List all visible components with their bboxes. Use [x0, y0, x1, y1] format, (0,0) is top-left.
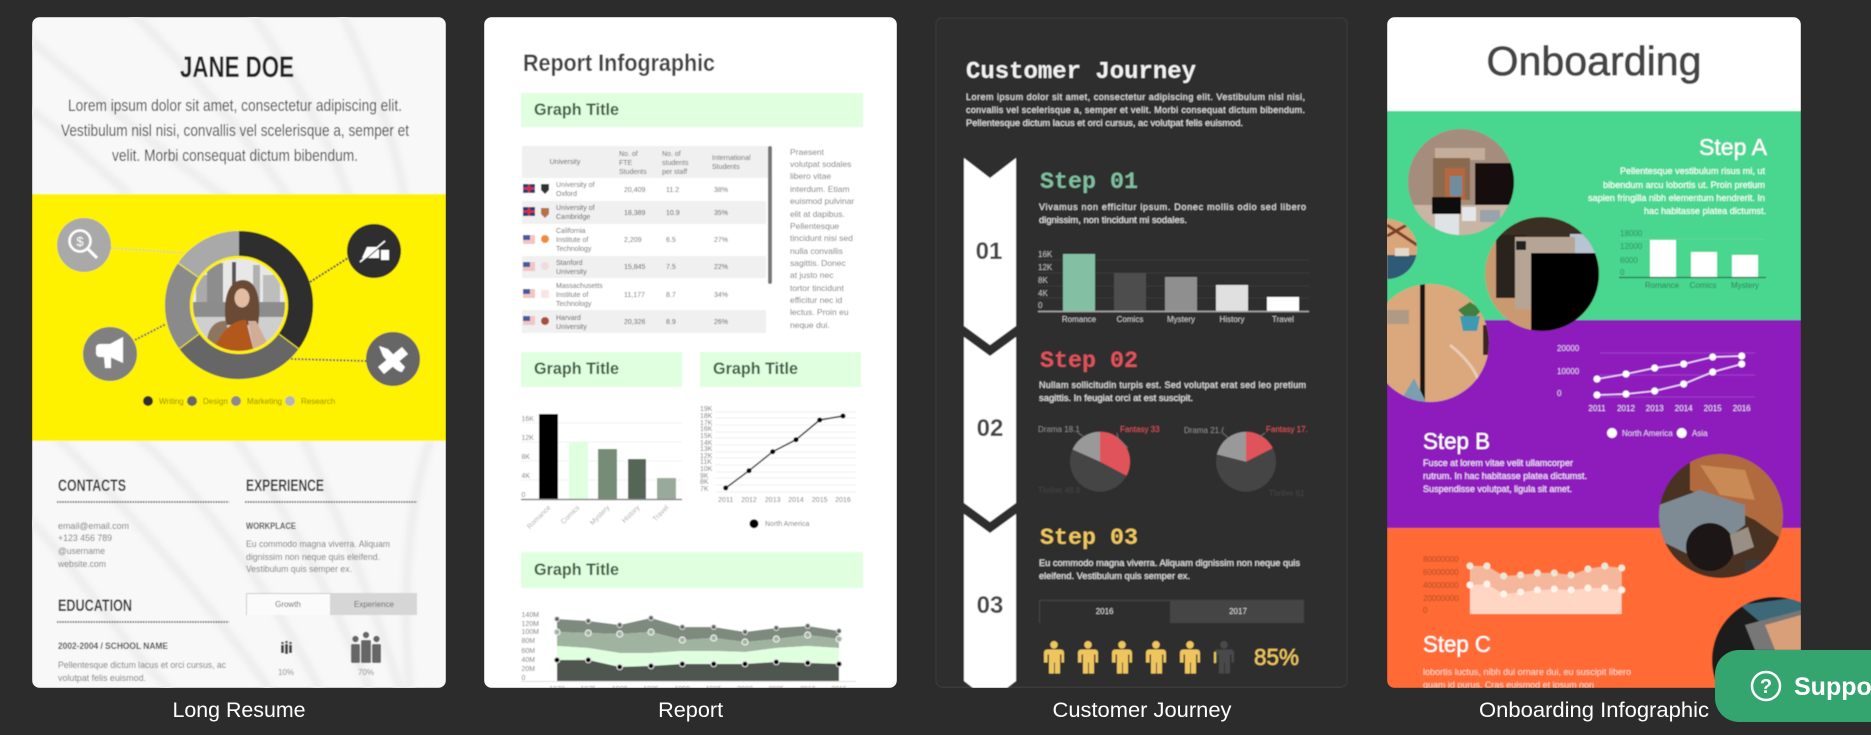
pie chart: left: Drama 18.1 — [1038, 425, 1080, 434]
table: universities: 35% — [714, 210, 728, 217]
side paragraph: efficitur nec id — [790, 295, 843, 305]
bar chart: step A: Romance — [1645, 281, 1680, 290]
side paragraph: neque dui. — [790, 320, 830, 330]
donut chart — [177, 243, 301, 367]
contacts text — [57, 521, 129, 569]
line chart: 16K — [700, 426, 713, 433]
pie chart: left: Fantasy 33 — [1120, 425, 1160, 434]
pie chart: right: Fantasy 17. — [1266, 425, 1308, 434]
step 01 text: dignissim, non tincidunt mi sodales. — [1039, 215, 1187, 225]
line chart: 2014 — [788, 497, 804, 504]
bar chart: 4K — [522, 473, 530, 480]
table: universities: California — [556, 228, 586, 235]
table: universities: Technology — [556, 246, 592, 253]
table: universities: Stanford — [556, 260, 583, 267]
education text: Pellentesque dictum lacus et orci cursus, ac — [58, 660, 226, 670]
tabs: growth and experience: Growth — [275, 600, 301, 609]
experience text — [246, 521, 390, 574]
stat: 85 percent: 85% — [1254, 644, 1299, 670]
chevron: step 01: 01 — [976, 238, 1002, 265]
table: universities: International — [712, 155, 751, 162]
stacked area chart: 2005 — [769, 686, 784, 693]
pictogram: people 85 percent — [1044, 641, 1234, 674]
stacked area chart: 1975 — [581, 686, 596, 693]
connector lines — [111, 248, 366, 361]
table: universities: Harvard — [556, 315, 581, 322]
table: universities: 7.5 — [666, 264, 676, 271]
bar chart: step 01: 0 — [1038, 301, 1043, 310]
banner: graph title 1: Graph Title — [534, 101, 619, 119]
heading: contacts: CONTACTS — [58, 476, 126, 495]
chart legend: Design — [203, 397, 228, 406]
table: universities: Institute of — [556, 237, 588, 244]
percent labels: 70% — [358, 668, 374, 677]
bar chart: Comics — [560, 504, 582, 526]
line chart: step B: 2013 — [1646, 404, 1664, 413]
side paragraph: euismod pulvinar — [790, 196, 854, 206]
icon: search money — [57, 218, 111, 272]
table: universities: University of — [556, 205, 595, 212]
heading: step 01: Step 01 — [1040, 169, 1138, 195]
bar chart: step 01: Romance — [1062, 315, 1097, 324]
table: universities: University — [550, 159, 581, 166]
side paragraph: at justo nec — [790, 270, 834, 280]
step C text: quam id purus. Cras euismod et ipsum non — [1423, 680, 1594, 690]
banner: graph title 1 — [521, 93, 863, 127]
icon: pencil and ruler — [366, 332, 420, 386]
stacked area chart: 80M — [522, 638, 535, 645]
pie chart: right — [1184, 425, 1308, 498]
band: step C orange — [1387, 528, 1801, 688]
intro paragraph: Lorem ipsum dolor sit amet, consectetur adipiscing elit. Vestibulum nisl nisi, — [966, 92, 1305, 102]
table: universities: students — [662, 160, 689, 167]
line chart: 13K — [700, 446, 713, 453]
step A text — [1588, 166, 1766, 216]
icon: help question mark: ? — [1760, 676, 1772, 698]
line chart: 10K — [700, 466, 713, 473]
title: customer journey: Customer Journey — [966, 59, 1196, 86]
table: universities: 10.9 — [666, 210, 680, 217]
step 02 text: sagittis. In feugiat orci at est suscipit. — [1039, 393, 1193, 403]
bar chart: Romance — [526, 504, 552, 531]
table: universities: 38% — [714, 187, 728, 194]
line chart: step B: 10000 — [1557, 367, 1580, 376]
experience text: Eu commodo magna viverra. Aliquam — [246, 539, 390, 549]
panel: onboarding card — [1357, 17, 1838, 723]
table: universities: Cambridge — [556, 214, 590, 221]
tabs: 2016 and 2017 — [1040, 600, 1304, 623]
icon: writing hand — [347, 224, 401, 278]
contacts text: @username — [58, 546, 105, 556]
table: universities: per staff — [662, 169, 687, 176]
intro paragraph: Vestibulum nisl nisi, convallis vel scelerisque a, semper et — [61, 121, 409, 140]
table: universities: Students — [712, 164, 740, 171]
step B text — [1423, 458, 1587, 494]
band: step B purple — [1387, 320, 1801, 528]
photo circle: office wall — [1408, 129, 1515, 235]
step A text: Pellentesque vestibulum risus mi, ut — [1620, 166, 1765, 176]
line chart: step B — [1557, 344, 1755, 438]
pie chart: left: Thriller 48.8 — [1038, 486, 1081, 495]
stacked area chart: 1980 — [612, 686, 628, 693]
stacked area chart: 20M — [522, 666, 535, 673]
step A text: sapien fringilla nibh elementum hendrerit. In — [1588, 193, 1765, 203]
banner: graph title 4 — [521, 552, 863, 588]
table: universities: 18,389 — [624, 210, 646, 217]
intro paragraph: Lorem ipsum dolor sit amet, consectetur adipiscing elit. — [68, 96, 402, 115]
bar chart: step 01: 12K — [1038, 263, 1053, 272]
table: universities — [522, 146, 772, 333]
chevron: step 02: 02 — [977, 415, 1003, 442]
stacked area chart: 140M — [522, 612, 539, 619]
photo circle: computers on desk — [1485, 217, 1600, 333]
line chart: 2016 — [835, 497, 851, 504]
table: universities: 26% — [714, 319, 728, 326]
band: step A green — [1387, 111, 1801, 320]
table: universities: 6.5 — [666, 237, 676, 244]
panel: customer journey card — [936, 18, 1348, 688]
photo circle: wood desk with plant — [1371, 284, 1489, 402]
portrait photo — [190, 255, 290, 357]
table: universities: University — [556, 269, 587, 276]
stacked area chart: 0 — [522, 675, 526, 682]
step 03 text: eleifend. Vestibulum quis semper ex. — [1039, 571, 1190, 581]
step 03 text: Eu commodo magna viverra. Aliquam dignissim non neque quis — [1039, 558, 1301, 568]
table: universities: Technology — [556, 301, 592, 308]
chevron: step 03: 03 — [977, 592, 1003, 619]
line chart: step B: 2011 — [1588, 404, 1606, 413]
line chart: step B: 2016 — [1733, 404, 1751, 413]
table: universities: 34% — [714, 292, 728, 299]
banner: graph title 3 — [700, 352, 861, 387]
side paragraph: elit at dapibus. — [790, 209, 845, 219]
table: universities: 22% — [714, 264, 728, 271]
chevron: step 01 — [964, 158, 1016, 345]
table: universities: 8.7 — [666, 292, 676, 299]
table: universities: 20,409 — [624, 187, 646, 194]
icon: small people group — [281, 641, 292, 654]
step C text — [1423, 667, 1631, 690]
bar chart: step A: Mystery — [1731, 281, 1759, 290]
step 01 text — [1039, 202, 1306, 225]
table: universities: 8.9 — [666, 319, 676, 326]
bar chart: step 01: Mystery — [1167, 315, 1195, 324]
stacked area chart: 60M — [522, 648, 535, 655]
table: universities: Institute of — [556, 292, 588, 299]
support button — [1715, 650, 1871, 722]
bar chart: Travel — [652, 504, 671, 523]
side paragraph: tincidunt nisi sed — [790, 233, 853, 243]
line chart: step B: 2014 — [1675, 404, 1693, 413]
heading: step B: Step B — [1423, 428, 1490, 454]
chart legend: Writing — [159, 397, 184, 406]
step A text: bibendum arcu lobortis ut. Proin pretium — [1603, 180, 1765, 190]
pie chart: left — [1038, 425, 1160, 495]
stacked area chart: 2015 — [831, 686, 847, 693]
banner: graph title 2: Graph Title — [534, 360, 619, 378]
bar chart: step 01 — [1038, 250, 1309, 324]
tabs: 2016 and 2017: 2017 — [1229, 607, 1247, 616]
side paragraph: interdum. Etiam — [790, 184, 850, 194]
table: universities: University of — [556, 182, 595, 189]
intro paragraph — [966, 92, 1305, 128]
title: report infographic: Report Infographic — [523, 50, 715, 77]
stacked area chart: 100M — [522, 629, 539, 636]
icon: large people group — [351, 632, 381, 663]
bar chart — [521, 414, 682, 531]
stacked area chart: 1990 — [675, 686, 690, 693]
chevron: step 03 — [964, 514, 1016, 688]
line chart: step B: 2012 — [1617, 404, 1635, 413]
title: JANE DOE: JANE DOE — [180, 51, 294, 84]
bar chart: step 01: Comics — [1117, 315, 1143, 324]
pie chart: right: Thriller 61 — [1269, 489, 1305, 498]
line chart: step B: North America — [1622, 429, 1673, 438]
area chart: step C: 20000000 — [1423, 594, 1459, 603]
table: universities: University — [556, 324, 587, 331]
heading: step 03: Step 03 — [1040, 525, 1138, 551]
side paragraph: libero vitae — [790, 171, 831, 181]
education text: volutpat felis euismod. — [58, 673, 146, 683]
line chart: step B: 2015 — [1704, 404, 1722, 413]
intro paragraph: convallis vel scelerisque a, semper et velit. Morbi consequat dictum bibendum. — [966, 105, 1305, 115]
line chart: 8K — [700, 479, 709, 486]
title: onboarding: Onboarding — [1486, 38, 1702, 84]
chart legend — [143, 396, 335, 406]
line chart: 12K — [700, 453, 713, 460]
stacked area chart: 40M — [522, 657, 535, 664]
photo circle: person with laptop — [1659, 454, 1783, 578]
table: universities: Students — [619, 169, 647, 176]
heading: education: EDUCATION — [58, 596, 132, 615]
stacked area chart: 1970 — [549, 686, 565, 693]
panel: long resume card — [30, 10, 446, 690]
side paragraph: Praesent — [790, 147, 825, 157]
bar chart: step A: 6000 — [1620, 256, 1638, 265]
contacts text: website.com — [57, 559, 106, 569]
side paragraph: sagittis. Donec — [790, 258, 846, 268]
chevron: step 02 — [964, 337, 1016, 522]
step 03 text — [1039, 558, 1301, 581]
area chart: step C — [1423, 555, 1625, 615]
caption: customer journey: Customer Journey — [1052, 699, 1232, 722]
chart legend: Research — [301, 397, 335, 406]
contacts text: +123 456 789 — [58, 533, 112, 543]
heading: step C: Step C — [1423, 631, 1491, 657]
caption: onboarding infographic: Onboarding Infographic — [1479, 699, 1709, 722]
line chart — [700, 406, 856, 528]
banner: graph title 2 — [521, 352, 682, 387]
line chart: 7K — [700, 486, 709, 493]
experience text: Vestibulum quis semper ex. — [246, 564, 352, 574]
heading: step A: Step A — [1699, 134, 1768, 160]
table: universities: 20,326 — [624, 319, 646, 326]
pie chart: right: Drama 21.( — [1184, 426, 1224, 435]
heading: experience: EXPERIENCE — [246, 476, 324, 495]
step B text: rutrum. In hac habitasse platea dictumst. — [1423, 471, 1587, 481]
line chart: step B: Asia — [1692, 429, 1708, 438]
area chart: step C: 60000000 — [1423, 568, 1459, 577]
education text: 2002-2004 / SCHOOL NAME — [58, 641, 168, 651]
education text — [58, 641, 226, 683]
contacts text: email@email.com — [58, 521, 129, 531]
bar chart: step A: 0 — [1620, 268, 1625, 277]
experience text: WORKPLACE — [246, 521, 296, 531]
bar chart: step 01: 4K — [1038, 289, 1048, 298]
step A text: hac habitasse platea dictumst. — [1644, 206, 1766, 216]
line chart: step B: 0 — [1557, 389, 1562, 398]
line chart: 11K — [700, 459, 712, 466]
side paragraph: lectus. Proin eu — [790, 307, 849, 317]
line chart: 2011 — [718, 497, 733, 504]
step C text: lobortis luctus, nibh dui ornare dui, eu suscipit libero — [1423, 667, 1631, 677]
line chart: step B: 20000 — [1557, 344, 1580, 353]
step 01 text: Vivamus non efficitur ipsum. Donec mollis odio sed libero — [1039, 202, 1306, 212]
bar chart: step A — [1619, 229, 1766, 290]
stacked area chart: 2000 — [737, 686, 753, 693]
table: universities: No. of — [619, 151, 638, 158]
step B text: Suspendisse volutpat, ligula sit amet. — [1423, 484, 1572, 494]
bar chart: Mystery — [589, 504, 612, 527]
stacked area chart: 120M — [522, 621, 539, 628]
stacked area chart — [521, 612, 856, 693]
bar chart: step 01: Travel — [1272, 315, 1294, 324]
table: universities: Oxford — [556, 191, 577, 198]
bar chart: 0 — [522, 492, 526, 499]
line chart: 19K — [700, 406, 713, 413]
banner: graph title 4: Graph Title — [534, 561, 619, 579]
line chart: 2013 — [765, 497, 781, 504]
panel: report card — [484, 17, 897, 693]
banner: graph title 3: Graph Title — [713, 360, 798, 378]
line chart: 15K — [700, 433, 713, 440]
step 02 text: Nullam sollicitudin turpis est. Sed volutpat erat sed leo pretium — [1039, 380, 1306, 390]
intro paragraph: Pellentesque dictum lacus et orci cursus, ac volutpat felis euismod. — [966, 118, 1243, 128]
line chart: 18K — [700, 413, 713, 420]
step B text: Fusce at lorem vitae velit ullamcorper — [1423, 458, 1573, 468]
side paragraph — [790, 147, 854, 330]
caption: report: Report — [658, 699, 723, 722]
bar chart: 8K — [522, 454, 530, 461]
percent labels — [278, 668, 374, 676]
bar chart: step A: Comics — [1690, 281, 1716, 290]
bar chart: History — [621, 504, 642, 525]
yellow skills band — [32, 194, 446, 441]
line chart: 17K — [700, 420, 713, 427]
chart legend: Marketing — [247, 397, 282, 406]
side paragraph: tortor tincidunt — [790, 283, 844, 293]
table: universities: 27% — [714, 237, 728, 244]
bar chart: step 01: History — [1220, 315, 1244, 324]
caption: long resume: Long Resume — [172, 699, 306, 722]
intro paragraph: velit. Morbi consequat dictum bibendum. — [112, 146, 358, 165]
stacked area chart: 1995 — [706, 686, 722, 693]
bar chart: 12K — [522, 435, 534, 442]
icon: help question mark — [1752, 672, 1780, 700]
experience text: dignissim non neque quis eleifend. — [246, 552, 380, 562]
bar chart: step 01: 16K — [1038, 250, 1053, 259]
bar chart: step 01: 8K — [1038, 276, 1048, 285]
side paragraph: nulla convallis — [790, 246, 843, 256]
table: universities: 15,845 — [624, 264, 646, 271]
table: universities: Massachusetts — [556, 283, 603, 290]
area chart: step C: 80000000 — [1423, 555, 1459, 564]
percent labels: 10% — [278, 668, 294, 677]
line chart: North America — [765, 521, 809, 528]
line chart: 14K — [700, 440, 713, 447]
icon: megaphone — [83, 327, 137, 381]
side paragraph: volutpat sodales — [790, 159, 851, 169]
table: universities: No. of — [662, 151, 681, 158]
table: universities: 11,177 — [624, 292, 645, 299]
bar chart: 16K — [522, 416, 534, 423]
tabs: growth and experience — [246, 593, 417, 615]
line chart: 9K — [700, 473, 709, 480]
side paragraph: Pellentesque — [790, 221, 839, 231]
table: universities: 11.2 — [666, 187, 679, 194]
photo circle: hands on laptop — [1712, 597, 1838, 723]
stacked area chart: 1985 — [643, 686, 659, 693]
stacked area chart: 2010 — [800, 686, 816, 693]
tabs: 2016 and 2017: 2016 — [1096, 607, 1114, 616]
icon: search money: $ — [76, 234, 84, 249]
area chart: step C: 40000000 — [1423, 581, 1459, 590]
line chart: 2015 — [812, 497, 828, 504]
table: universities: 2,209 — [624, 237, 642, 244]
tabs: growth and experience: Experience — [354, 600, 395, 609]
bar chart: step A: 12000 — [1620, 242, 1643, 251]
step 02 text — [1039, 380, 1306, 403]
photo circle: left edge workspace — [1357, 219, 1417, 280]
table: universities: FTE — [619, 160, 633, 167]
line chart: 2012 — [741, 497, 757, 504]
intro paragraph — [61, 96, 409, 165]
bar chart: step A: 18000 — [1620, 229, 1643, 238]
heading: step 02: Step 02 — [1040, 348, 1138, 374]
area chart: step C: 0 — [1423, 606, 1428, 615]
